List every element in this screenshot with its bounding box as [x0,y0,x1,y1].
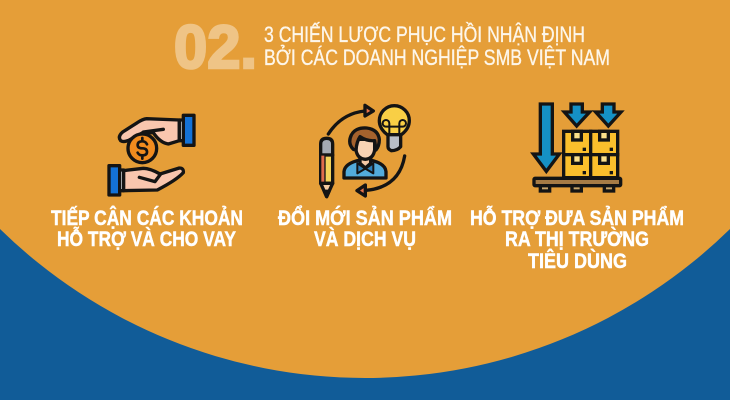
label: market support: HỖ TRỢ ĐƯA SẢN PHẨM [470,204,684,230]
blue curved background [0,229,730,400]
label: market support: RA THỊ TRƯỜNG [505,226,649,251]
icon: hands with coin [109,115,194,195]
icon: pencil [321,138,333,197]
label: innovation: ĐỔI MỚI SẢN PHẨM [278,205,452,230]
label: loans [51,205,243,251]
arrow: top cycle [328,105,373,134]
label: loans: HỖ TRỢ VÀ CHO VAY [57,225,236,251]
icon: person [344,128,386,178]
label: market support [470,204,684,273]
label: innovation [278,205,452,251]
arrow: bottom cycle [357,156,405,196]
label: loans: TIẾP CẬN CÁC KHOẢN [51,205,243,230]
icon: person with idea and pencil [321,105,409,197]
icon: boxes on pallet with arrows [533,104,621,191]
label: innovation: VÀ DỊCH VỤ [314,226,416,251]
icon: light bulb [379,106,409,151]
heading [264,22,610,70]
heading: BỞI CÁC DOANH NGHIỆP SMB VIỆT NAM [264,45,610,70]
section number: 02. [174,13,257,81]
heading: 3 CHIẾN LƯỢC PHỤC HỒI NHẬN ĐỊNH [264,22,585,47]
label: market support: TIÊU DÙNG [528,248,627,273]
